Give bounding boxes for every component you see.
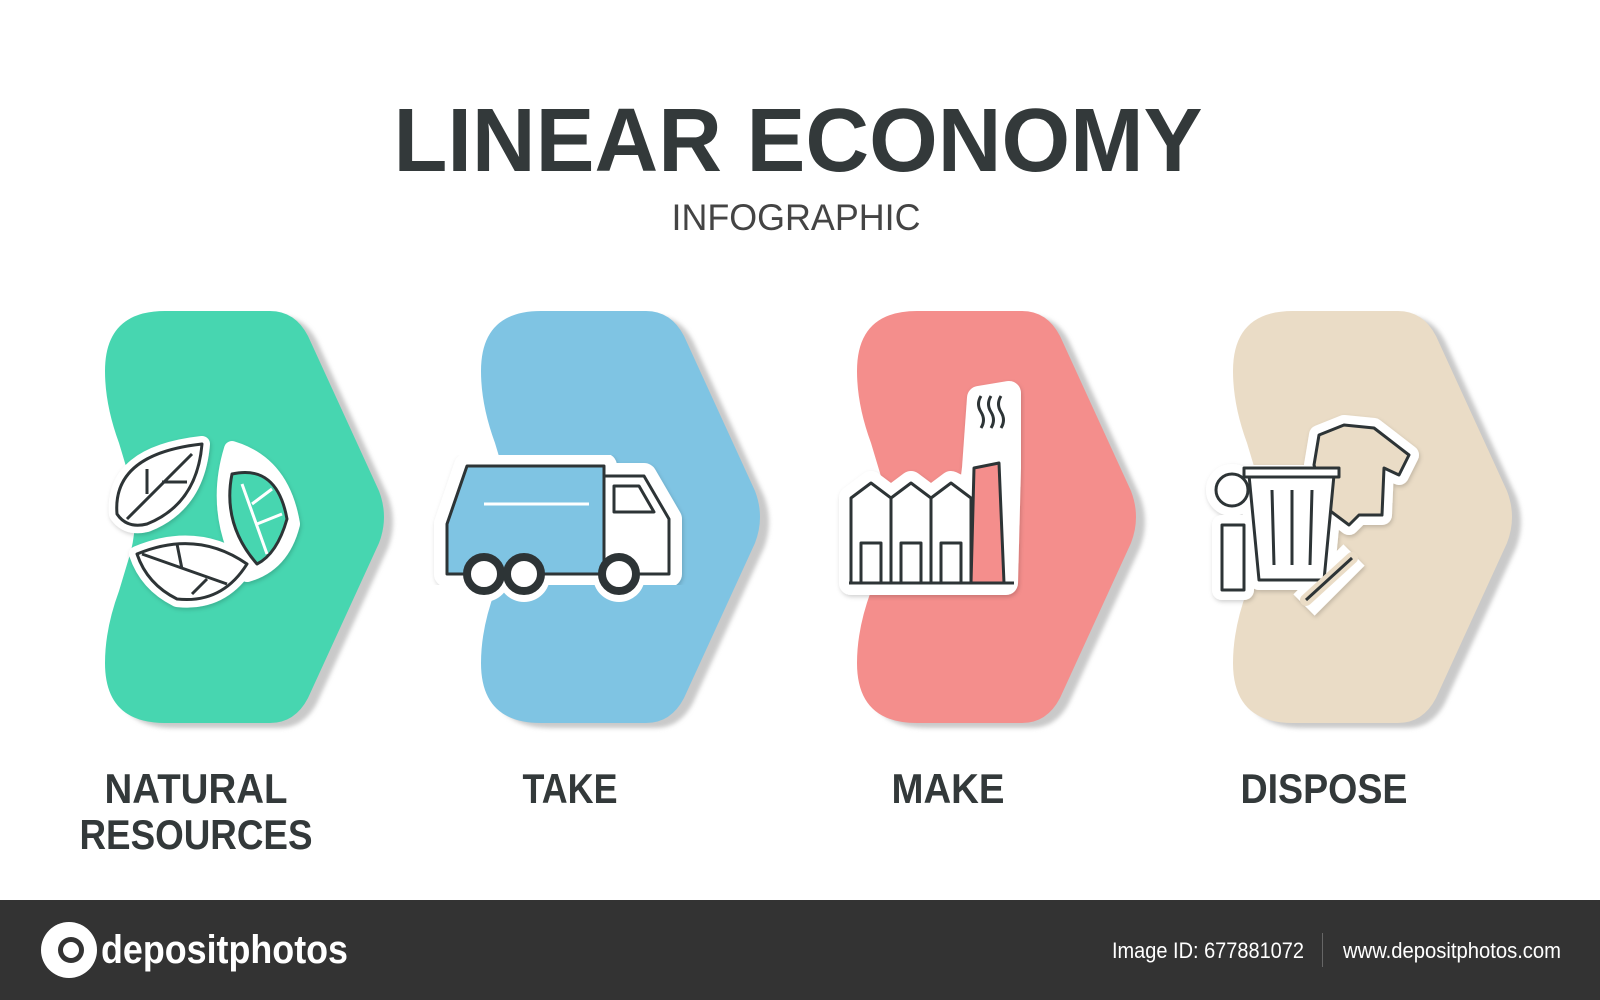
label: natural resources: RESOURCES [80, 811, 312, 858]
label: dispose: DISPOSE [1240, 765, 1408, 812]
panel: make [849, 311, 1145, 728]
label: make: MAKE [892, 765, 1004, 812]
website: www.depositphotos.com [1342, 938, 1561, 963]
icon: truck [447, 466, 669, 602]
image id: Image ID: 677881072 [1112, 938, 1304, 963]
label: natural resources: NATURAL [104, 765, 288, 812]
logo text: depositphotos [101, 928, 348, 972]
icon: logo camera [41, 922, 97, 978]
panel: natural resources [105, 311, 393, 728]
icon: trash [1216, 425, 1409, 605]
icon: leaves [117, 444, 292, 600]
label: natural resources [80, 765, 312, 858]
icon: factory [849, 393, 1014, 583]
title: LINEAR ECONOMY [394, 91, 1202, 191]
panel: take [447, 311, 769, 728]
subtitle: INFOGRAPHIC [672, 197, 920, 238]
panel: dispose [1216, 311, 1521, 728]
footer bar [0, 900, 1600, 1000]
label: take: TAKE [522, 765, 618, 812]
